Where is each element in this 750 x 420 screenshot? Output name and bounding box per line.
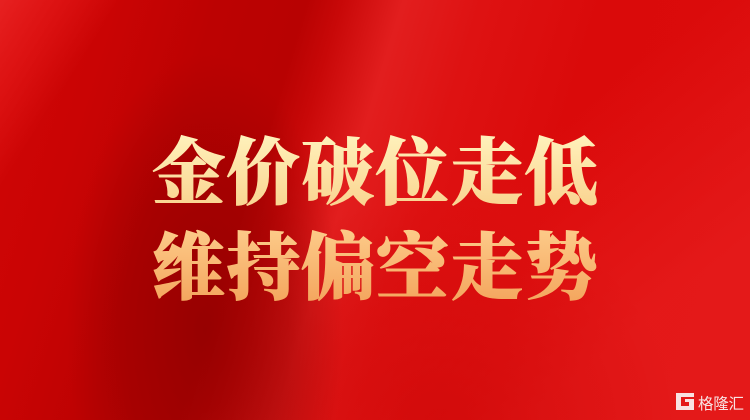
icon: G logo (676, 393, 694, 410)
logo text: 格隆汇 (698, 395, 744, 413)
logo watermark (676, 393, 744, 413)
headline (152, 133, 598, 309)
headline line 1: 金价破位走低 (152, 133, 598, 214)
headline line 2: 维持偏空走势 (152, 228, 598, 309)
